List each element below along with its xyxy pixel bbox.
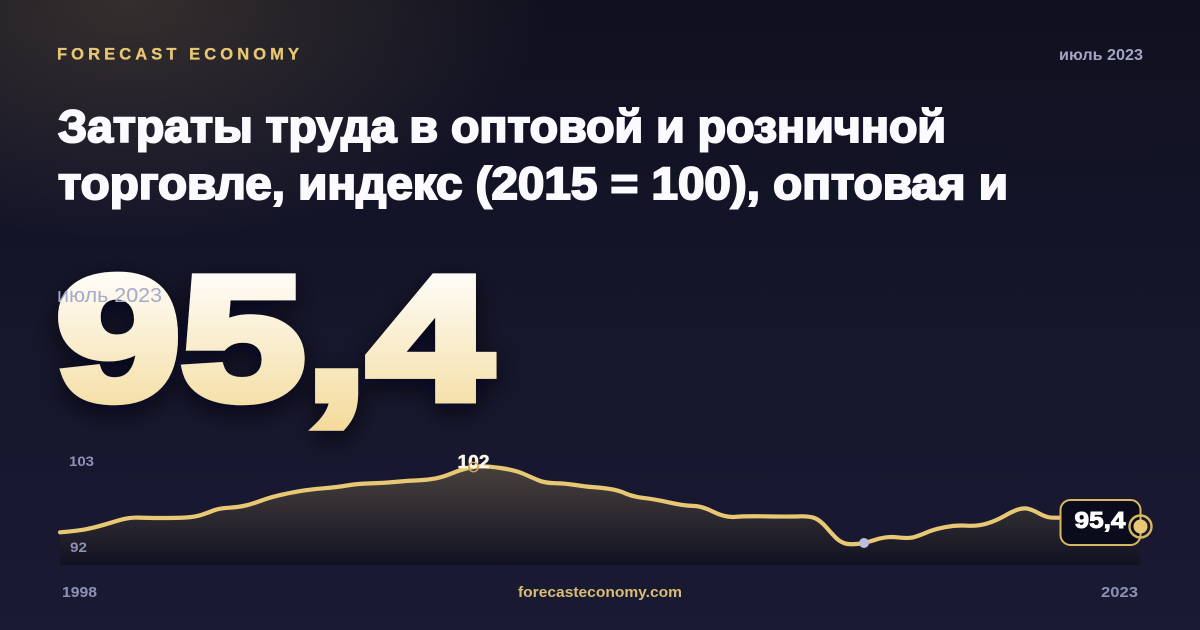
title: Затраты труда в оптовой и розничной [58, 101, 946, 152]
big value: 95,4 [56, 241, 492, 437]
date under title: июль 2023 [57, 285, 162, 307]
minimum marker [859, 538, 869, 548]
title [58, 101, 1008, 209]
y axis max label: 103 [69, 453, 94, 469]
line chart [60, 452, 1152, 565]
website: forecasteconomy.com [518, 584, 682, 601]
start year: 1998 [62, 584, 97, 601]
title: торговле, индекс (2015 = 100), оптовая и [58, 158, 1008, 209]
date top right: июль 2023 [1059, 47, 1143, 64]
brand label: FORECAST ECONOMY [57, 46, 299, 64]
end year: 2023 [1101, 584, 1138, 601]
current value callout: 95,4 [1074, 507, 1126, 533]
y axis min label: 92 [70, 539, 87, 555]
current value callout [1060, 500, 1140, 545]
chart line [60, 466, 1140, 544]
chart area fill [60, 466, 1140, 565]
peak marker [469, 462, 478, 472]
peak value label: 102 [458, 452, 490, 472]
current value marker [1130, 516, 1152, 538]
